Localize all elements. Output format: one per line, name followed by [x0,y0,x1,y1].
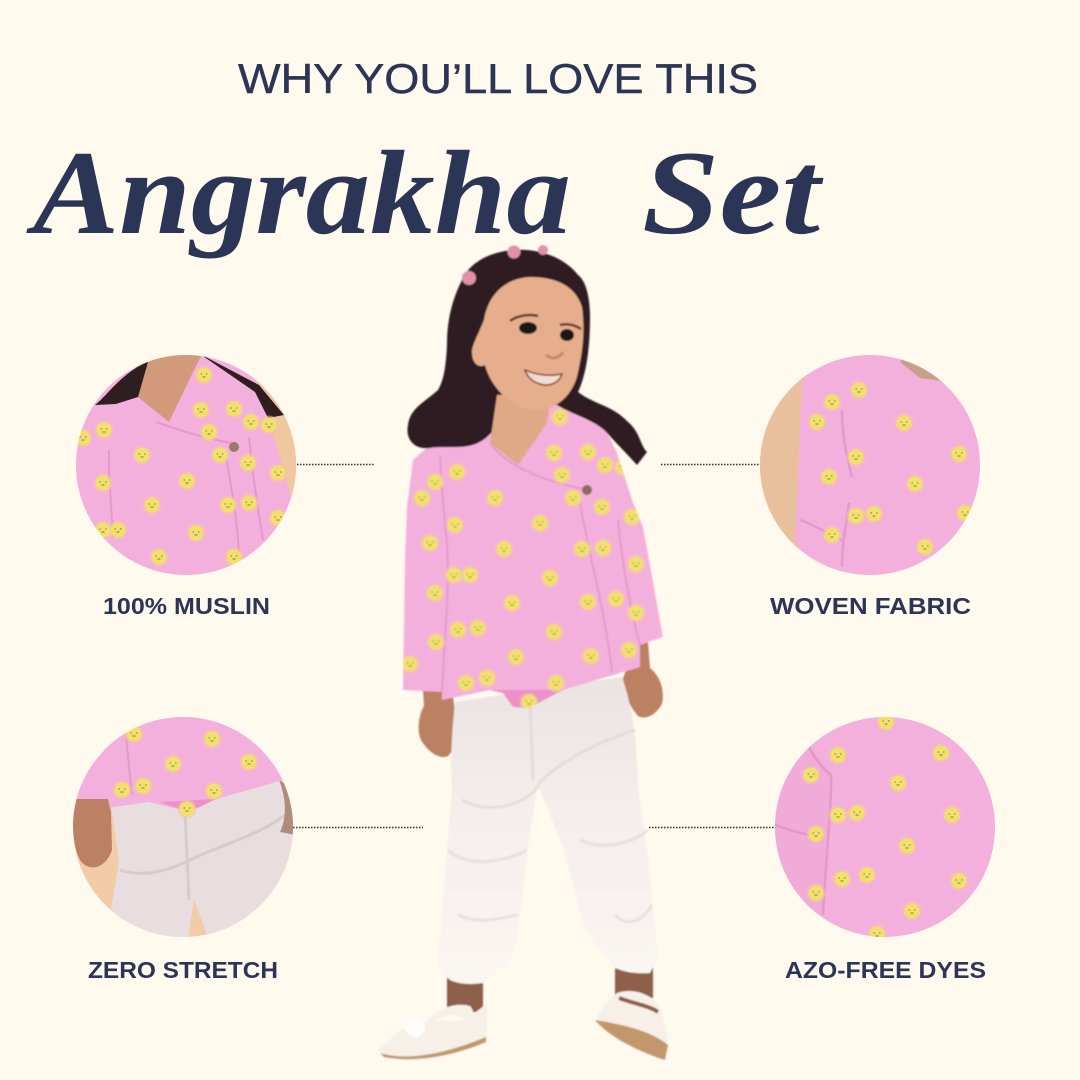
title: Angrakha Set: Set [642,126,824,259]
inner panel under hem [490,690,563,708]
left shoe [378,1003,487,1061]
hair [407,250,647,465]
eyebrows [510,315,581,329]
trousers [437,677,658,984]
neck [490,395,555,465]
dotted connector [293,826,423,828]
zoom circle: shirt front [74,354,300,580]
dotted connector [297,464,375,466]
dotted connector [649,826,775,828]
button [582,485,592,495]
sun print [400,408,646,712]
panel: zero stretch [72,716,423,983]
panel: woven fabric [661,353,982,619]
label: AZO-FREE DYES [785,957,986,983]
zoom circle: shirt sleeve [758,353,982,577]
zoom circle: hem and trousers [72,716,296,940]
central figure: girl in angrakha set [378,245,668,1061]
trouser shading [448,700,652,922]
smile [525,370,562,385]
eyes [519,322,574,341]
label: 100% MUSLIN [103,593,270,619]
zoom circle: printed fabric [770,712,998,944]
nose [546,352,563,358]
ankles [447,964,653,1012]
hair clips [462,245,548,285]
shirt seams [440,443,640,692]
heading: why you'll love this: WHY YOU’LL LOVE THIS [238,55,758,102]
left hand [419,690,457,757]
dotted connector [661,464,759,466]
panel: azo-free dyes [649,712,998,983]
panel: 100% muslin [74,354,375,619]
face [472,277,583,410]
shirt [403,402,663,708]
right hand [623,640,663,718]
right shoe [595,991,668,1060]
label: ZERO STRETCH [88,957,278,983]
title: Angrakha Set: Angrakha [25,126,571,259]
label: WOVEN FABRIC [770,593,971,619]
